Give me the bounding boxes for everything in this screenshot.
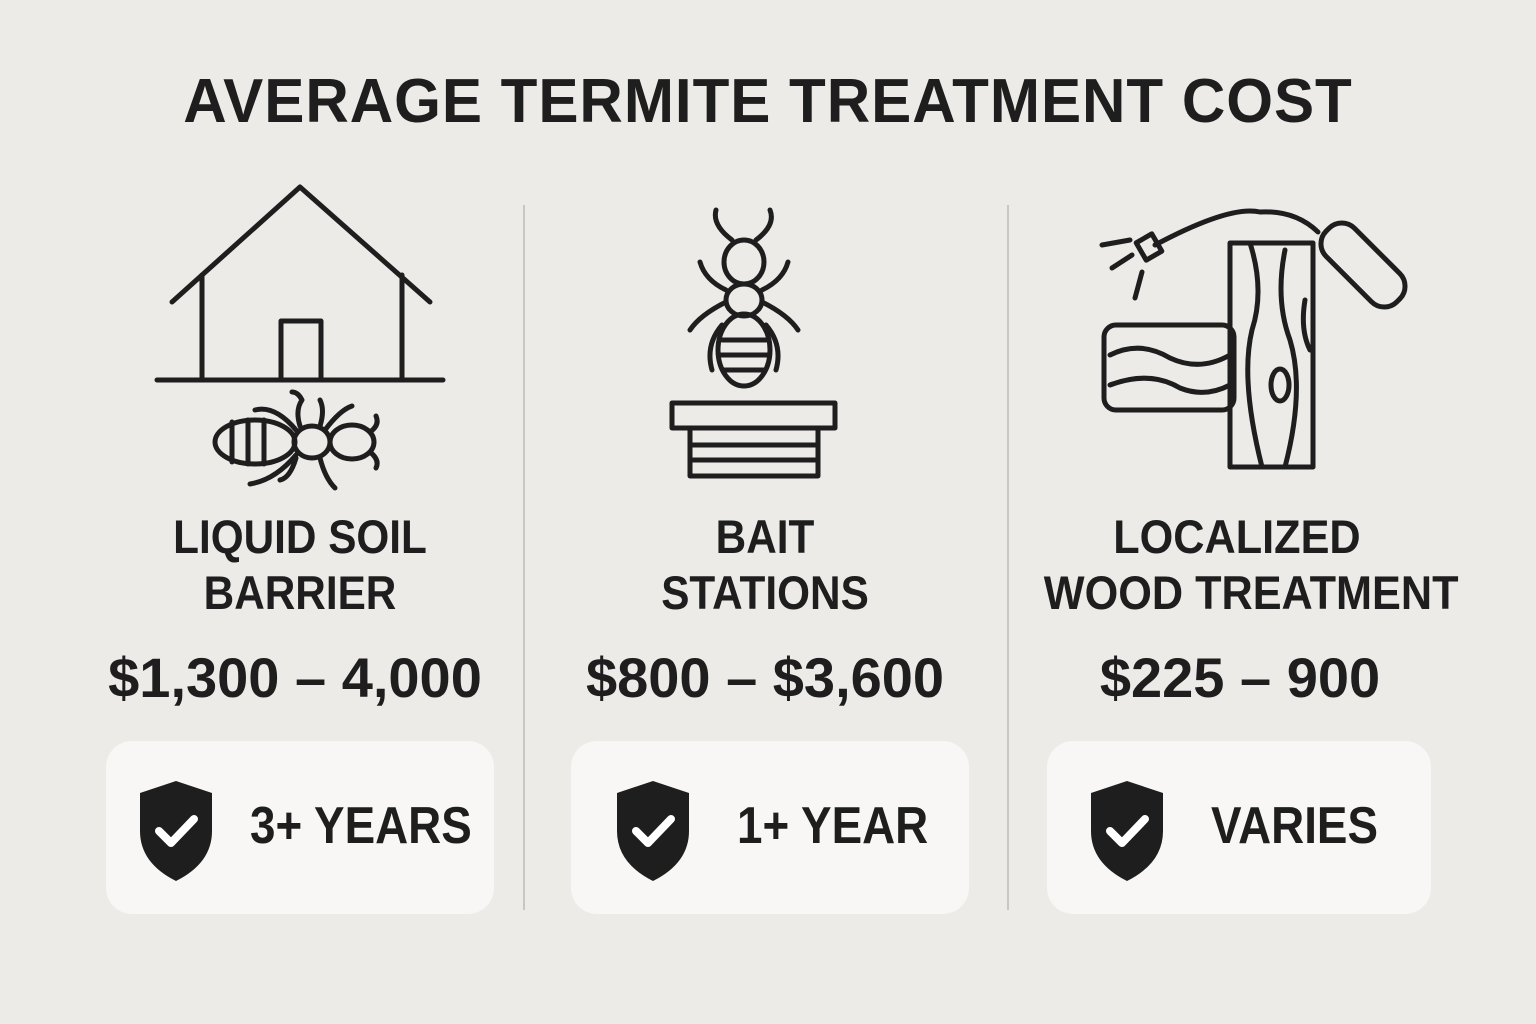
icon: wood with sprayer <box>1100 208 1408 470</box>
label: liquid soil barrier <box>173 510 427 619</box>
icon: termite on bait station <box>670 208 838 478</box>
card 2 <box>571 741 969 914</box>
title: AVERAGE TERMITE TREATMENT COST <box>183 67 1353 136</box>
price 2: $800 – $3,600 <box>586 646 944 709</box>
icon: shield <box>140 781 212 881</box>
icon: house with termite <box>154 184 446 490</box>
card 2: 1+ YEAR <box>737 797 928 855</box>
price 3: $225 – 900 <box>1100 646 1380 709</box>
label: liquid soil barrier: BARRIER <box>204 566 396 619</box>
label: bait stations: STATIONS <box>661 566 869 619</box>
icon: shield <box>617 781 689 881</box>
label: localized wood treatment: WOOD TREATMENT <box>1044 566 1458 619</box>
label: bait stations: BAIT <box>716 510 814 563</box>
label: bait stations <box>661 510 869 619</box>
label: localized wood treatment <box>1044 510 1458 619</box>
price 1: $1,300 – 4,000 <box>108 646 482 709</box>
icon: shield <box>1091 781 1163 881</box>
card 3: VARIES <box>1211 797 1378 855</box>
label: localized wood treatment: LOCALIZED <box>1113 510 1361 563</box>
card 1 <box>106 741 494 914</box>
card 1: 3+ YEARS <box>250 797 472 855</box>
label: liquid soil barrier: LIQUID SOIL <box>173 510 427 563</box>
card 3 <box>1047 741 1431 914</box>
